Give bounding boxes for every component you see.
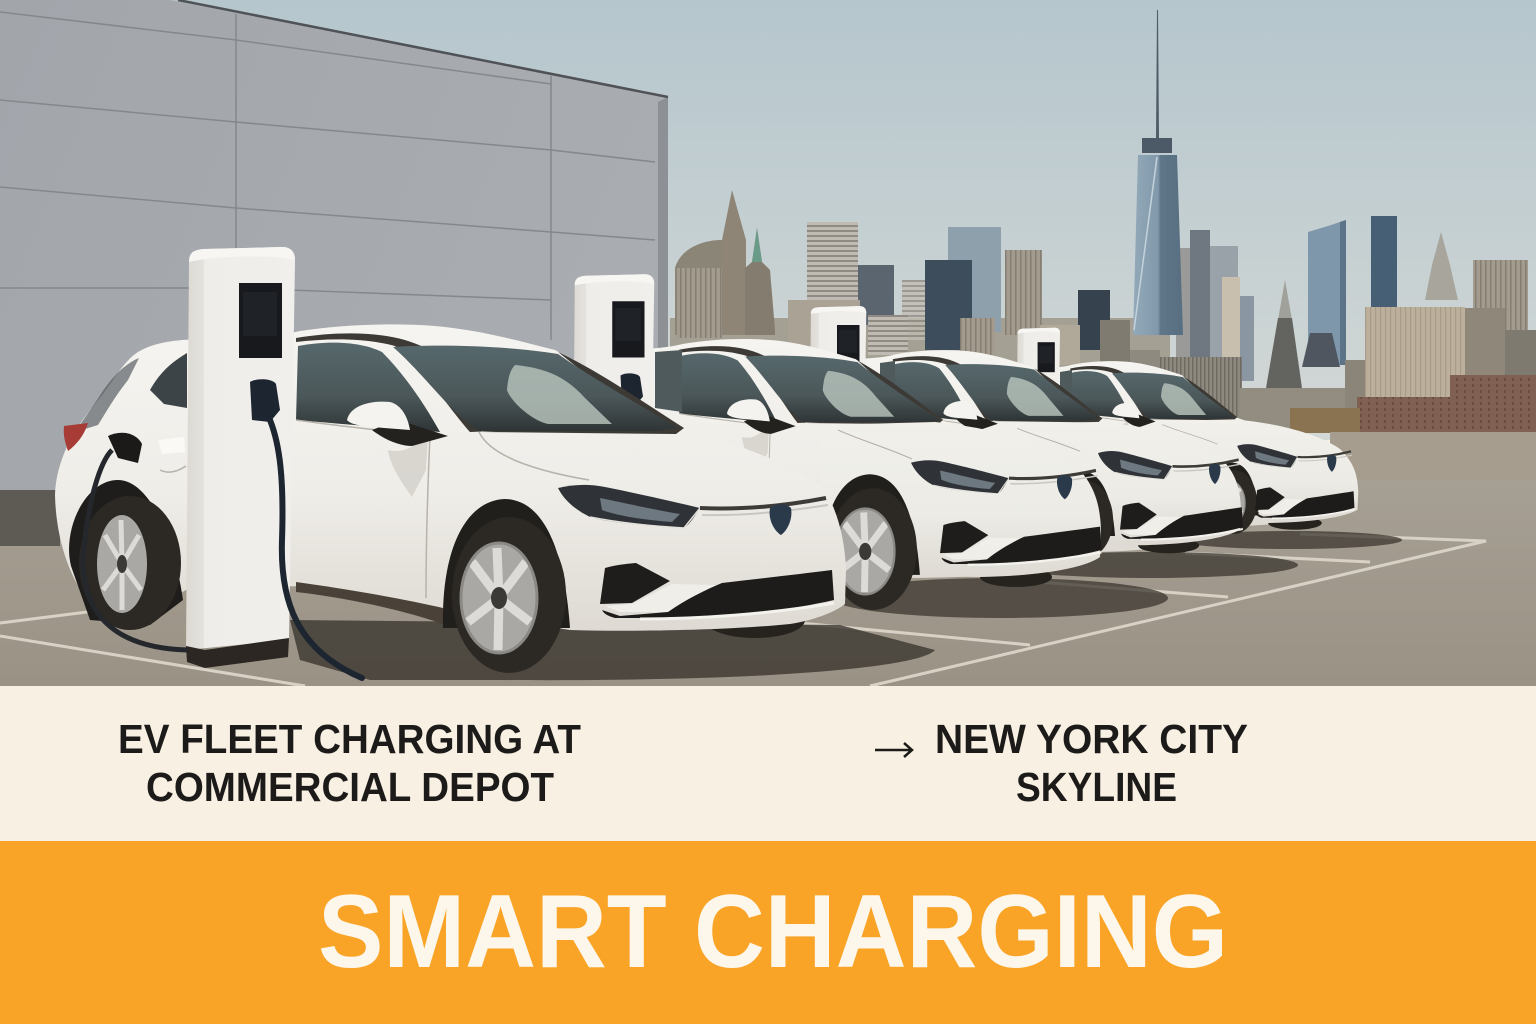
car 3 xyxy=(763,350,1243,558)
title banner xyxy=(0,841,1536,1024)
skyline: One World Trade tower xyxy=(1133,10,1183,335)
parking bay lines xyxy=(0,534,1486,686)
title: SMART CHARGING xyxy=(318,874,1228,990)
caption band xyxy=(0,686,1536,841)
depot pavement xyxy=(0,480,1536,686)
skyline: background buildings xyxy=(670,190,1536,435)
rooftop parapet wall xyxy=(1330,432,1536,480)
charging port and cable to car 1 xyxy=(83,433,188,650)
arrow xyxy=(875,743,912,757)
car 1 (front) xyxy=(55,324,846,673)
cable from charger 1 xyxy=(270,420,362,678)
caption background xyxy=(0,686,1536,841)
commercial depot building xyxy=(0,0,668,490)
caption: New York City skyline: SKYLINE xyxy=(1016,764,1177,810)
caption: EV fleet charging at commercial depot: EV FLEET CHARGING AT xyxy=(118,716,581,762)
car 4 (furthest) xyxy=(967,361,1358,534)
city skyline xyxy=(670,10,1536,435)
banner background xyxy=(0,841,1536,1024)
skyline: low brick buildings and trees xyxy=(1290,375,1536,433)
caption: New York City skyline: NEW YORK CITY xyxy=(935,716,1248,762)
car 2 xyxy=(515,339,1101,610)
caption: EV fleet charging at commercial depot xyxy=(118,716,581,810)
caption: EV fleet charging at commercial depot: COMMERCIAL DEPOT xyxy=(146,764,554,810)
caption: New York City skyline xyxy=(935,716,1248,810)
charger 3 xyxy=(809,306,866,526)
charger 2 xyxy=(572,274,654,590)
car shadows xyxy=(290,531,1402,680)
charger 1 (front) xyxy=(186,247,295,668)
charger 4 xyxy=(1016,328,1060,496)
sky xyxy=(0,0,1536,440)
background scene photo xyxy=(0,0,1536,686)
